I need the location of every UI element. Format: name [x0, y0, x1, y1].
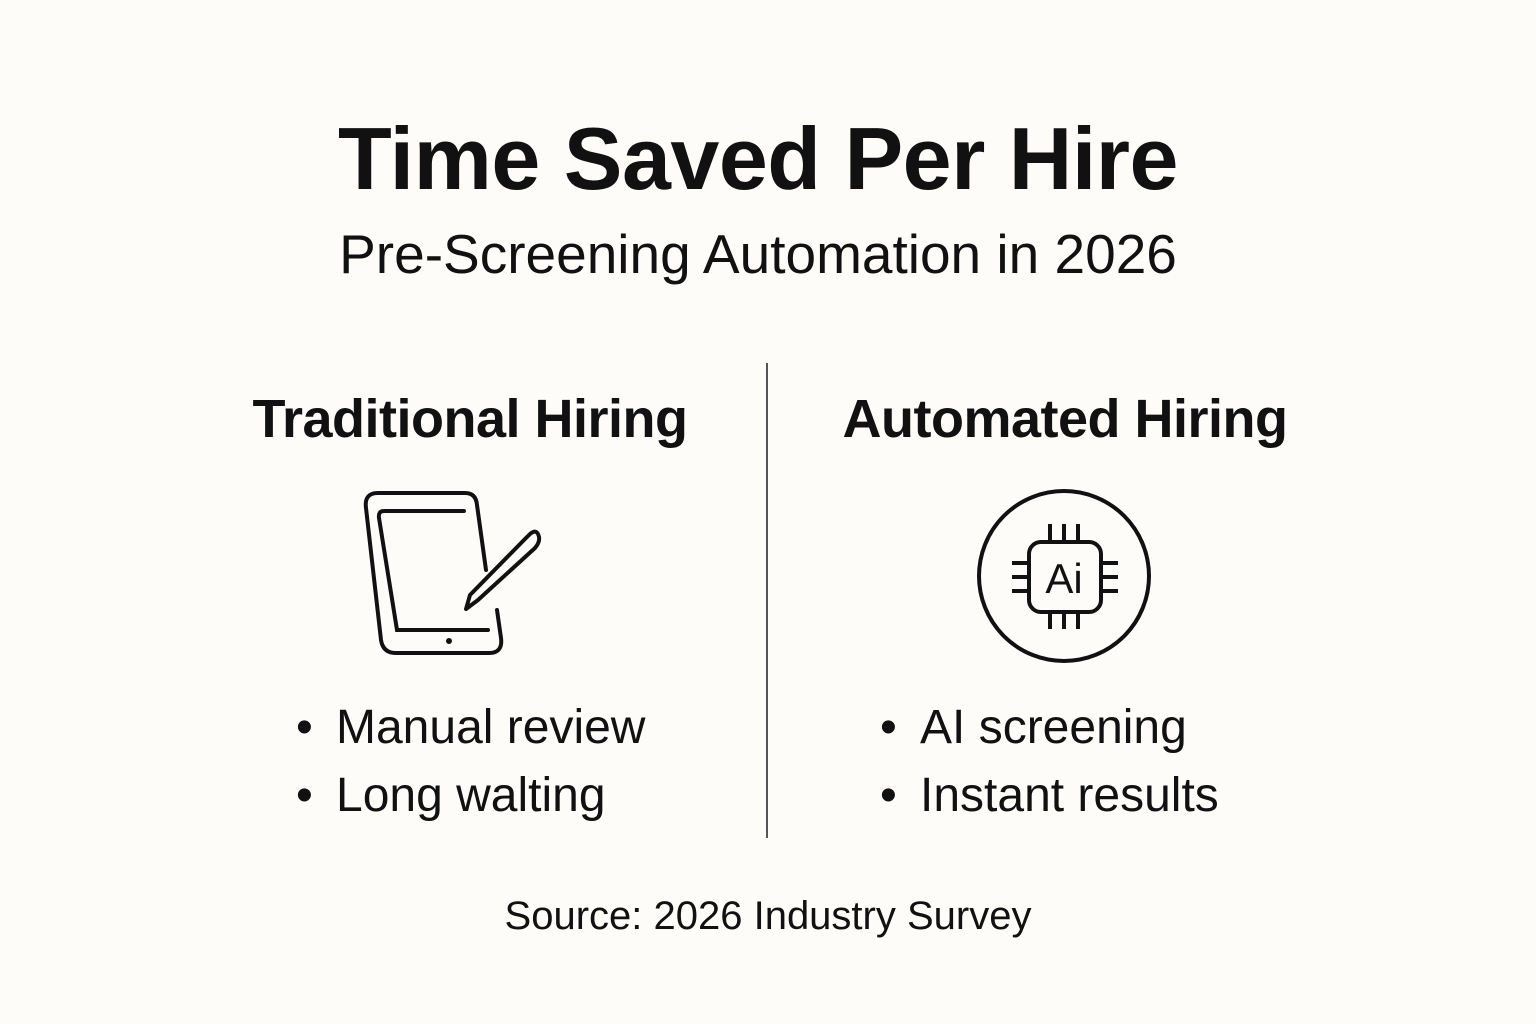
bullets: automated: AI screening	[920, 701, 1187, 754]
panel: traditional hiring	[252, 389, 688, 822]
bullets: traditional	[296, 701, 646, 822]
heading: automated: Automated Hiring	[842, 389, 1288, 449]
icon: AI chip in circle	[977, 489, 1151, 663]
source: Source: 2026 Industry Survey	[505, 894, 1031, 938]
icon: tablet with pen	[364, 491, 542, 655]
bullets: automated: •	[880, 769, 897, 822]
bullets: traditional: Long walting	[336, 769, 606, 822]
bullets: automated: •	[880, 701, 897, 754]
heading: traditional: Traditional Hiring	[252, 389, 688, 449]
bullets: traditional: •	[296, 769, 313, 822]
divider	[766, 363, 768, 838]
title: Time Saved Per Hire	[338, 109, 1178, 208]
bullets: automated	[880, 701, 1219, 822]
icon: AI chip in circle: Ai	[1045, 555, 1083, 602]
panel: automated hiring	[842, 389, 1288, 822]
bullets: traditional: Manual review	[336, 701, 645, 754]
bullets: traditional: •	[296, 701, 313, 754]
subtitle: Pre-Screening Automation in 2026	[339, 223, 1177, 285]
bullets: automated: Instant results	[920, 769, 1219, 822]
